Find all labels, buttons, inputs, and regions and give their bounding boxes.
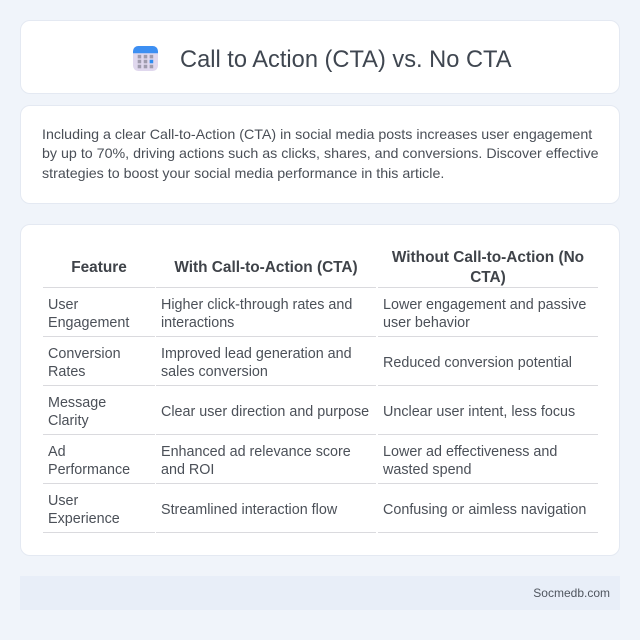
header: With CTA: With Call-to-Action (CTA) [174, 259, 358, 276]
row: User Experience: Confusing or aimless navigation [383, 502, 586, 518]
header: Feature: Feature [71, 259, 127, 276]
intro text: strategies to boost your social media performance in this article. [42, 166, 444, 182]
icon: calendar [133, 46, 158, 71]
row: Conversion Rates: Rates [48, 364, 85, 380]
row: Ad Performance: Ad [48, 444, 66, 460]
row: Message Clarity: Clear user direction and purpose [161, 404, 369, 420]
row: User Experience: Experience [48, 511, 120, 527]
row: Ad Performance: wasted spend [383, 462, 472, 478]
row: User Engagement: Higher click-through rates and [161, 297, 352, 313]
row: User Experience [48, 493, 586, 527]
row: Ad Performance: Performance [48, 462, 130, 478]
row: Message Clarity [48, 395, 575, 429]
row: User Experience: Streamlined interaction flow [161, 502, 337, 518]
intro text: by up to 70%, driving actions such as clicks, shares, and conversions. Discover effective [42, 146, 599, 162]
row: Message Clarity: Unclear user intent, less focus [383, 404, 575, 420]
table [43, 249, 598, 533]
row: Conversion Rates: Improved lead generation and [161, 346, 352, 362]
row: User Engagement [48, 297, 586, 331]
row: Conversion Rates: Conversion [48, 346, 121, 362]
row: User Engagement: User [48, 297, 78, 313]
row: Ad Performance: Enhanced ad relevance score [161, 444, 351, 460]
row: User Engagement: user behavior [383, 315, 470, 331]
intro text [42, 127, 599, 182]
row: User Engagement: Lower engagement and passive [383, 297, 586, 313]
row: Message Clarity: Message [48, 395, 106, 411]
row: Conversion Rates: Reduced conversion potential [383, 355, 572, 371]
row: Ad Performance [48, 444, 557, 478]
row: User Engagement: Engagement [48, 315, 129, 331]
intro text: Including a clear Call-to-Action (CTA) in social media posts increases user engagement [42, 127, 592, 143]
row: Message Clarity: Clarity [48, 413, 89, 429]
row: Conversion Rates [48, 346, 572, 380]
header card [20, 20, 620, 94]
footer bar [20, 576, 620, 610]
row: Ad Performance: and ROI [161, 462, 214, 478]
intro card [20, 105, 620, 204]
header: Without CTA: CTA) [470, 269, 506, 286]
header: Without CTA: Without Call-to-Action (No [392, 249, 584, 266]
row: Conversion Rates: sales conversion [161, 364, 268, 380]
row: User Engagement: interactions [161, 315, 234, 331]
row: User Experience: User [48, 493, 78, 509]
title: Call to Action (CTA) vs. No CTA [180, 47, 511, 73]
row: Ad Performance: Lower ad effectiveness and [383, 444, 557, 460]
table card [20, 224, 620, 556]
footer text: Socmedb.com [533, 586, 610, 600]
header: Without CTA [392, 249, 584, 286]
